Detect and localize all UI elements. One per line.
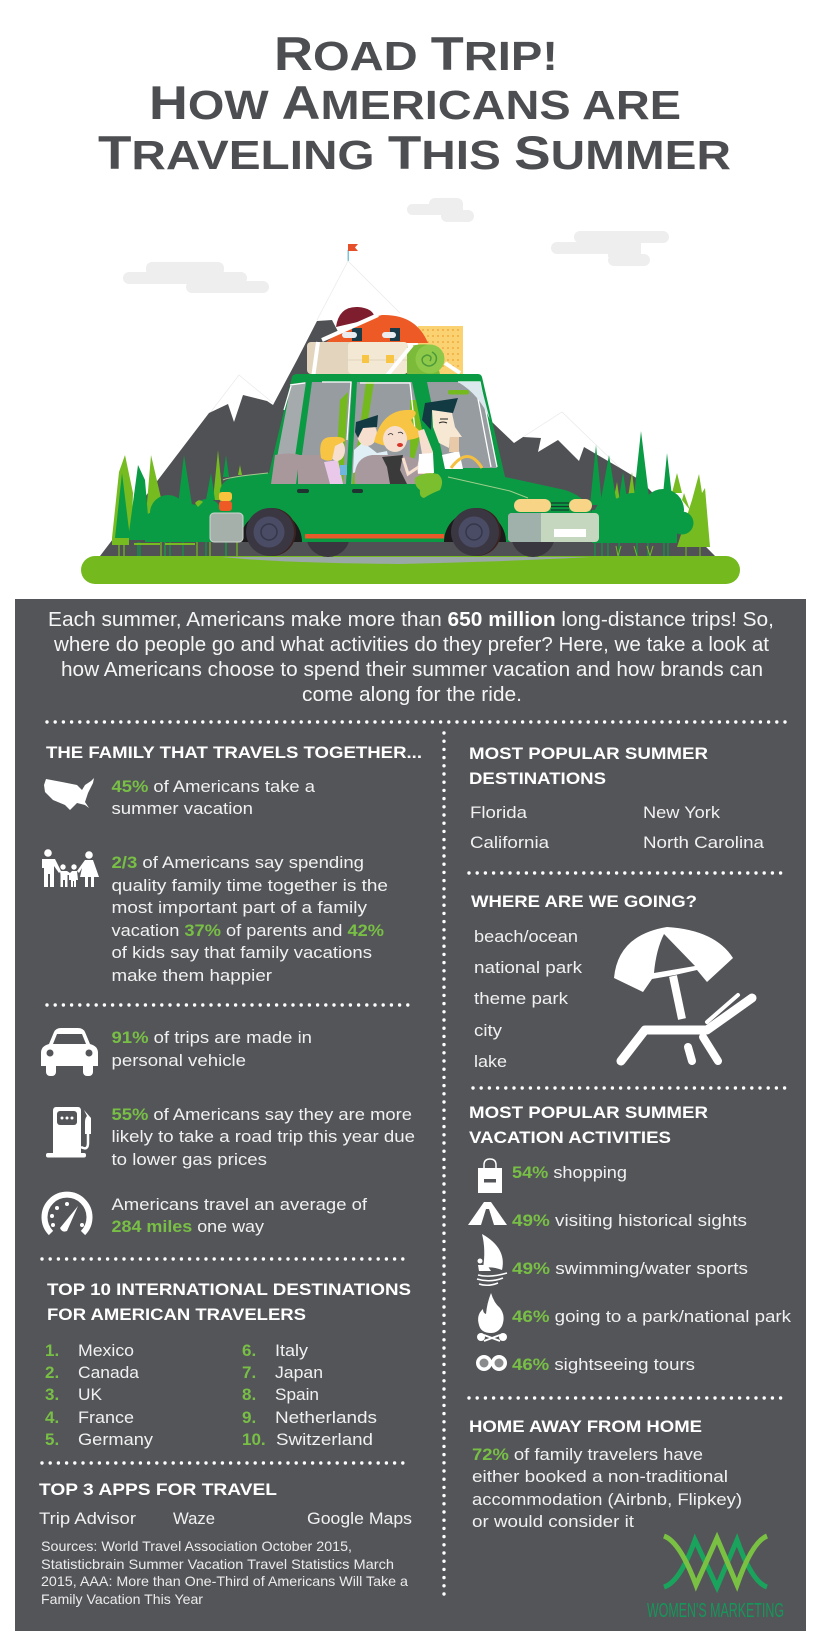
destination list: 10. (242, 1430, 266, 1449)
destination list: 8. (242, 1385, 256, 1404)
mountains (100, 261, 715, 556)
sources: Family Vacation This Year (41, 1591, 203, 1607)
destination list: France (78, 1408, 134, 1427)
stat: summer vacation: summer vacation (112, 799, 253, 818)
where are we going: WHERE ARE WE GOING? (471, 892, 697, 911)
where are we going: theme park (474, 989, 569, 1008)
car details (210, 473, 599, 542)
destination list: Canada (78, 1363, 140, 1382)
icon: family (42, 849, 99, 887)
intro paragraph (48, 609, 774, 706)
stat: family time: quality family time together is the (112, 876, 388, 895)
heading: top 10 (47, 1280, 411, 1324)
title: HOW AMERICANS ARE (149, 76, 681, 129)
activity: historical sights (468, 1202, 747, 1230)
destination list: 2. (45, 1363, 59, 1382)
destination list: Japan (275, 1363, 323, 1382)
destination list: Spain (275, 1385, 319, 1404)
destination list: Italy (275, 1341, 309, 1360)
stat: personal vehicle: personal vehicle (112, 1051, 246, 1070)
top 3 apps: TOP 3 APPS FOR TRAVEL (39, 1480, 277, 1499)
icon: campfire (477, 1293, 507, 1341)
activity: sightseeing: 46% sightseeing tours (512, 1355, 695, 1374)
activity: park (477, 1293, 792, 1341)
boy (353, 415, 388, 473)
top 3 apps (39, 1480, 412, 1528)
heading: top 10: TOP 10 INTERNATIONAL DESTINATIONS (47, 1280, 411, 1299)
most popular destinations: MOST POPULAR SUMMER (469, 744, 708, 763)
stat: miles (45, 1195, 367, 1236)
sources: 2015, AAA: More than One-Third of Americans Will Take a (41, 1573, 408, 1589)
icon: shopping bag (478, 1159, 502, 1193)
home away from home: accommodation (Airbnb, Flipkey) (472, 1490, 742, 1509)
driver (418, 398, 482, 474)
white luggage straps (313, 315, 460, 378)
destination list: Germany (78, 1430, 154, 1449)
most popular destinations: California (470, 833, 550, 852)
destination list: 7. (242, 1363, 256, 1382)
icon: binoculars (476, 1355, 507, 1371)
icon: pyramid (468, 1202, 507, 1225)
vacation activities: VACATION ACTIVITIES (469, 1128, 671, 1147)
vacation activities (468, 1103, 792, 1374)
stat: gas prices: likely to take a road trip this year due (112, 1127, 415, 1146)
intro paragraph: Each summer, Americans make more than 650 million long-distance trips! So, (48, 609, 774, 631)
most popular destinations: New York (643, 803, 721, 822)
home away from home: HOME AWAY FROM HOME (469, 1417, 702, 1436)
rear wheel (246, 508, 296, 556)
activity: water sports: 49% swimming/water sports (512, 1259, 748, 1278)
title (98, 27, 731, 179)
stat: family time: of kids say that family vacations (112, 943, 372, 962)
activity: shopping: 54% shopping (512, 1163, 627, 1182)
destination list: Netherlands (275, 1408, 377, 1427)
stat: gas prices (46, 1105, 415, 1169)
vacation activities: MOST POPULAR SUMMER (469, 1103, 708, 1122)
destination list: Switzerland (276, 1430, 373, 1449)
heading: the family: THE FAMILY THAT TRAVELS TOGETHER... (46, 743, 422, 762)
stat: summer vacation: 45% of Americans take a (112, 777, 316, 796)
where are we going: beach/ocean (474, 927, 578, 946)
destination list (45, 1341, 377, 1449)
icon: beach umbrella and lounger (614, 927, 752, 1061)
icon: gas pump (46, 1107, 91, 1158)
top 3 apps: Google Maps (307, 1509, 412, 1528)
where are we going: national park (474, 958, 583, 977)
girl (320, 437, 347, 484)
intro paragraph: how Americans choose to spend their summer vacation and how brands can (61, 659, 763, 681)
car body (220, 374, 592, 542)
home away from home: either booked a non-traditional (472, 1467, 728, 1486)
home away from home: or would consider it (472, 1512, 634, 1531)
front wheel (451, 508, 501, 556)
activity: shopping (478, 1159, 627, 1193)
trees left (112, 450, 242, 556)
destination list: 3. (45, 1385, 59, 1404)
stat: family time: vacation 37% of parents and 42% (112, 921, 384, 940)
where are we going: lake (474, 1052, 507, 1071)
icon: speedometer (45, 1195, 89, 1233)
destination list: 1. (45, 1341, 59, 1360)
wheel arches (240, 511, 506, 542)
stat: miles: 284 miles one way (112, 1217, 265, 1236)
stat: family time: 2/3 of Americans say spending (112, 853, 364, 872)
trees right (590, 431, 710, 556)
icon: windsurfer (477, 1234, 507, 1285)
ground (81, 556, 740, 584)
destination list: 5. (45, 1430, 59, 1449)
clouds (123, 198, 669, 293)
intro paragraph: come along for the ride. (302, 684, 522, 706)
stat: gas prices: to lower gas prices (112, 1150, 267, 1169)
logo: women's marketing (647, 1536, 784, 1622)
icon: car (41, 1028, 98, 1076)
panel (15, 599, 806, 1631)
activity: historical sights: 49% visiting historical sights (512, 1211, 747, 1230)
front seat (355, 455, 430, 484)
home away from home (469, 1417, 742, 1531)
destination list: UK (78, 1385, 103, 1404)
icon: usa map (44, 778, 94, 810)
stat: miles: Americans travel an average of (112, 1195, 367, 1214)
title: ROAD TRIP! (274, 27, 558, 80)
stat: personal vehicle: 91% of trips are made in (112, 1028, 312, 1047)
stat: gas prices: 55% of Americans say they are more (112, 1105, 412, 1124)
activity: park: 46% going to a park/national park (512, 1307, 792, 1326)
home away from home: 72% of family travelers have (472, 1445, 703, 1464)
where are we going (471, 892, 752, 1071)
stat: personal vehicle (41, 1028, 312, 1076)
stat: summer vacation (44, 777, 316, 818)
destination list: 6. (242, 1341, 256, 1360)
most popular destinations (469, 744, 765, 852)
luggage on the roof (307, 307, 463, 374)
title: TRAVELING THIS SUMMER (98, 126, 731, 179)
top 10 destinations (45, 1280, 411, 1449)
heading: top 10: FOR AMERICAN TRAVELERS (47, 1305, 306, 1324)
illustration: family road trip (81, 198, 740, 584)
most popular destinations: North Carolina (643, 833, 765, 852)
flag on the summit (348, 244, 358, 261)
sources: Statisticbrain Summer Vacation Travel Statistics March (41, 1556, 394, 1572)
road shadow (222, 557, 590, 564)
far wheels (306, 513, 555, 557)
destination list: Mexico (78, 1341, 134, 1360)
activity: water sports (477, 1234, 748, 1285)
most popular destinations: DESTINATIONS (469, 769, 606, 788)
car windows and passengers (271, 382, 497, 484)
top 3 apps: Waze (173, 1509, 215, 1528)
top 3 apps: Trip Advisor (39, 1509, 136, 1528)
intro paragraph: where do people go and what activities do they prefer? Here, we take a look at (53, 634, 769, 656)
stat: family time: make them happier (112, 966, 272, 985)
rear seat (271, 454, 330, 484)
mother (374, 410, 421, 484)
stat: family time: most important part of a family (112, 898, 368, 917)
most popular destinations: Florida (470, 803, 528, 822)
destination list: 4. (45, 1408, 59, 1427)
sources: Sources: World Travel Association October 2015, (41, 1538, 352, 1554)
sources (41, 1538, 408, 1607)
destination list: 9. (242, 1408, 256, 1427)
where are we going: city (474, 1021, 503, 1040)
stat: family time (42, 849, 388, 985)
